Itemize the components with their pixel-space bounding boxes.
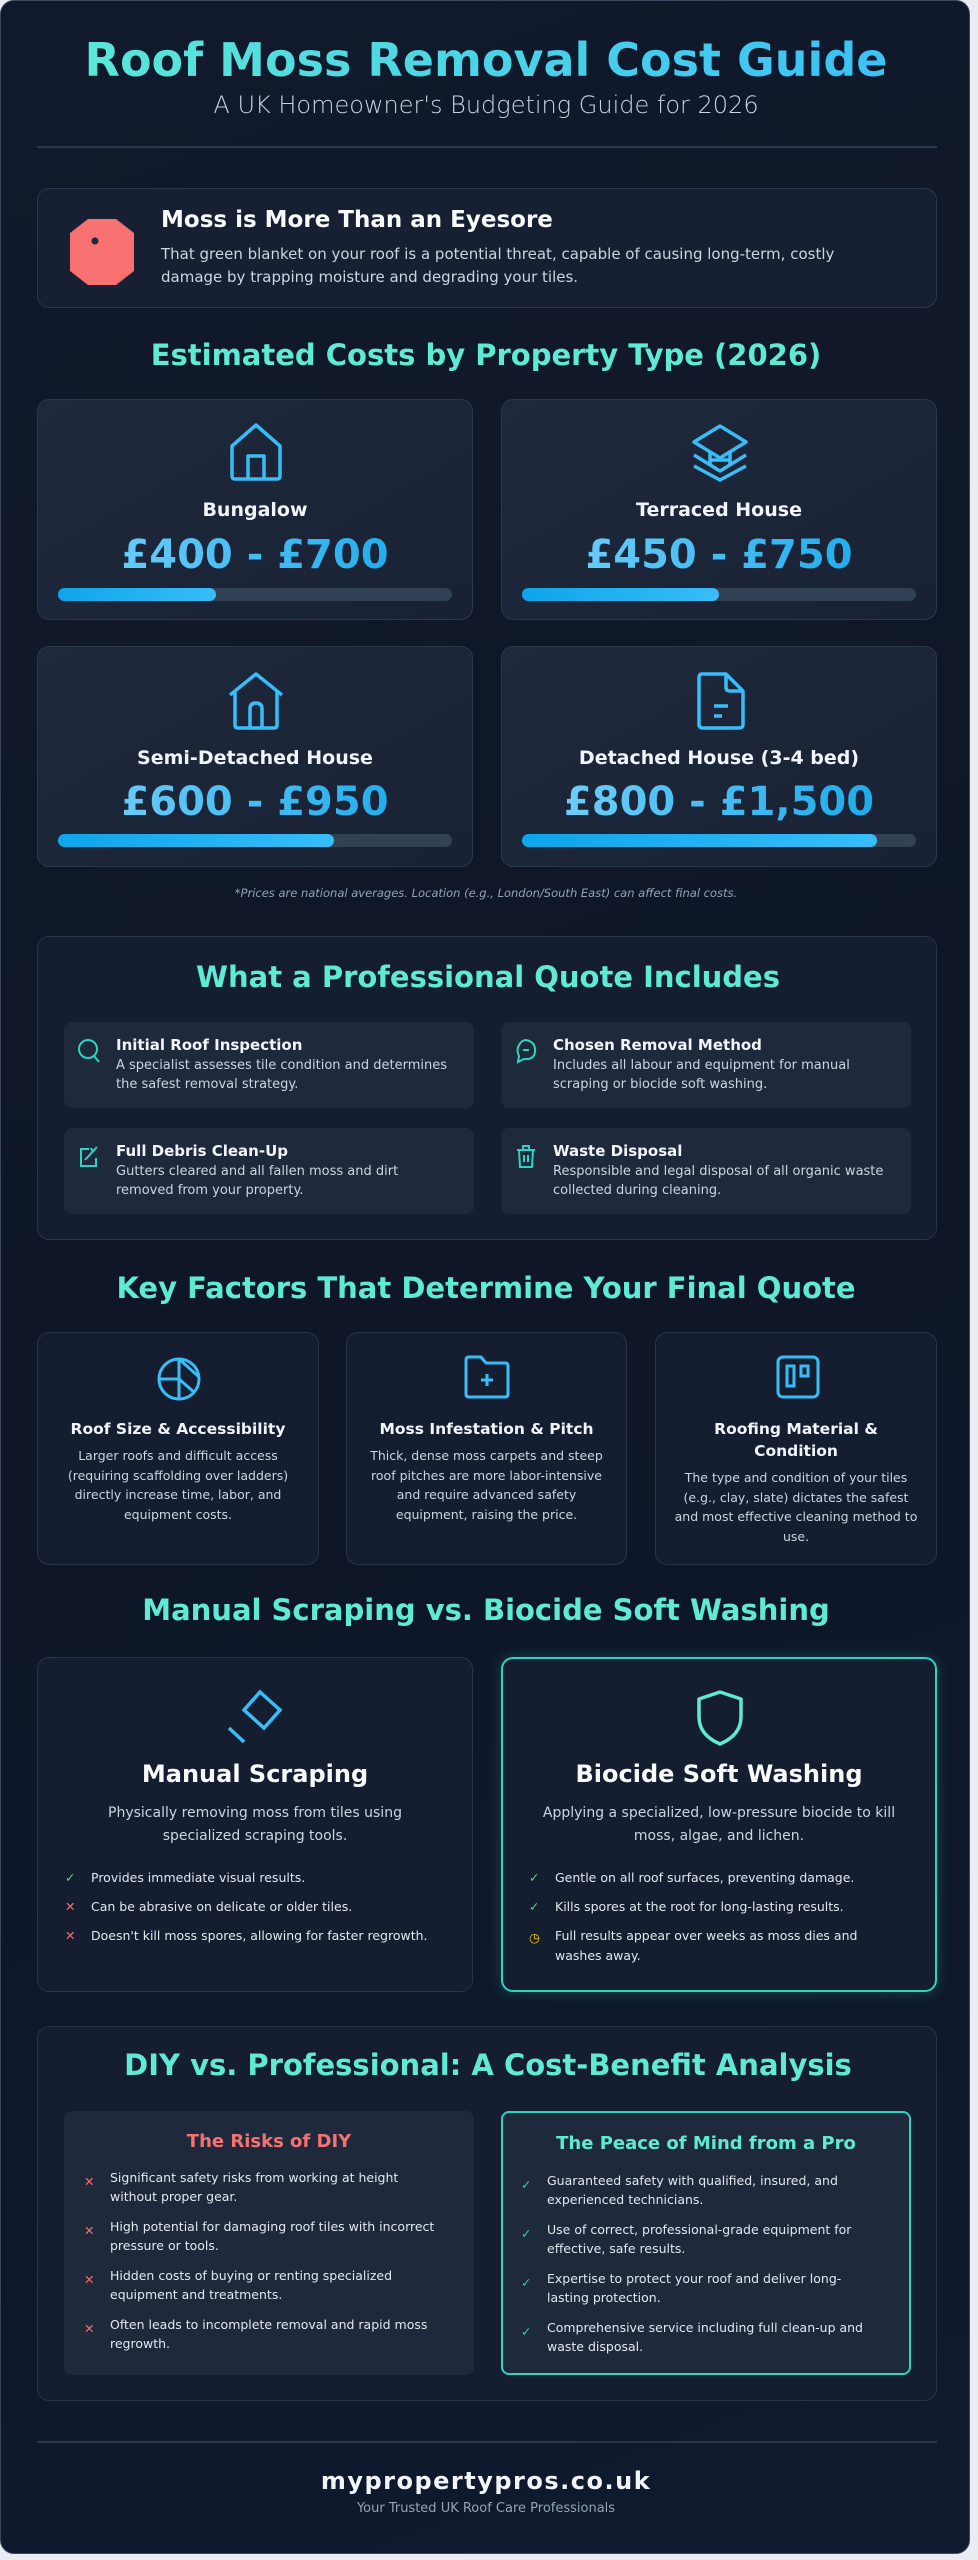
list: manual pros/cons: Provides immediate visual results. [91,1870,305,1885]
list: manual pros/cons: Doesn't kill moss spores, allowing for faster regrowth. [91,1928,428,1943]
card: bungalow: £400 - £700 [121,532,389,578]
list: manual pros/cons [65,1870,428,1943]
factor: roof size: Roof Size & Accessibility [71,1420,285,1438]
box: pro peace of mind: ✓ [521,2324,531,2339]
item: inspection: A specialist assesses tile condition and determines the safest removal strategy. [116,1058,447,1092]
alert panel [37,188,937,308]
factor: moss infestation [346,1332,627,1565]
box: risks of DIY: The Risks of DIY [187,2131,351,2152]
list: biocide pros: ✓ [529,1870,539,1885]
icon: layers [692,424,748,482]
card: terraced: Terraced House [636,499,802,521]
icon: scraper [228,1690,282,1744]
factor: roofing material [655,1332,937,1565]
alert heading: Moss is More Than an Eyesore [161,207,553,233]
item: waste disposal: Waste Disposal [553,1142,682,1160]
icon: document [697,672,745,730]
icon: folder plus [464,1356,510,1398]
factor: roofing material: The type and condition of your tiles (e.g., clay, slate) dictates the safest and most effective cleaning method to use. [675,1470,917,1544]
box: risks of DIY: Significant safety risks from working at height without proper gear. [110,2170,398,2204]
box: pro peace of mind: Use of correct, professional-grade equipment for effective, safe results. [547,2222,851,2256]
box: pro peace of mind: ✓ [521,2177,531,2192]
list: biocide pros: ✓ [529,1899,539,1914]
panel: biocide soft washing [501,1657,937,1992]
item: clean-up: Full Debris Clean-Up [116,1142,288,1160]
list: biocide pros [529,1870,857,1963]
box: risks of DIY: ✕ [84,2174,94,2189]
alert text: That green blanket on your roof is a potential threat, capable of causing long-term, costly damage by trapping moisture and degrading your tiles. [161,245,834,286]
factor: moss infestation: Moss Infestation & Pitch [379,1420,594,1438]
list: biocide pros: Full results appear over weeks as moss dies and washes away. [555,1928,857,1963]
heading: key factors: Key Factors That Determine Your Final Quote [116,1271,856,1305]
box: pro peace of mind: Expertise to protect your roof and deliver long-lasting protection. [547,2271,841,2305]
box: risks of DIY: Hidden costs of buying or renting specialized equipment and treatments. [110,2268,392,2302]
item: waste disposal [501,1128,911,1214]
item: waste disposal: Responsible and legal disposal of all organic waste collected during cleaning. [553,1164,883,1198]
factor: roof size [37,1332,319,1565]
card: semi-detached [37,646,473,867]
item: inspection: Initial Roof Inspection [116,1036,302,1054]
item: inspection [64,1022,474,1108]
card: terraced [501,399,937,620]
icon: pie [158,1358,200,1400]
list: manual pros/cons: ✕ [65,1899,75,1914]
heading: manual vs biocide: Manual Scraping vs. Biocide Soft Washing [142,1593,830,1627]
footer tagline: Your Trusted UK Roof Care Professionals [357,2501,615,2516]
icon: shield [697,1690,743,1746]
list: manual pros/cons: Can be abrasive on delicate or older tiles. [91,1899,352,1914]
box: risks of DIY [64,2111,474,2375]
card: detached [501,646,937,867]
panel: manual scraping: Manual Scraping [142,1760,368,1788]
footer site: mypropertypros.co.uk [321,2467,651,2495]
card: semi-detached: £600 - £950 [121,779,389,825]
item: removal method: Chosen Removal Method [553,1036,762,1054]
card: detached: Detached House (3-4 bed) [579,747,859,769]
box: pro peace of mind: The Peace of Mind from a Pro [556,2133,856,2154]
box: risks of DIY: High potential for damaging roof tiles with incorrect pressure or tools. [110,2219,434,2253]
list: manual pros/cons: ✓ [65,1870,75,1885]
item: clean-up: Gutters cleared and all fallen moss and dirt removed from your property. [116,1164,398,1198]
note: *Prices are national averages. Location (e.g., London/South East) can affect final costs. [235,886,737,900]
item: removal method: Includes all labour and equipment for manual scraping or biocide soft washing. [553,1058,850,1092]
list: biocide pros: Kills spores at the root for long-lasting results. [555,1899,844,1914]
card: terraced: £450 - £750 [585,532,853,578]
box: risks of DIY: ✕ [84,2321,94,2336]
heading: What a Professional Quote Includes [196,960,780,994]
factor: moss infestation: Thick, dense moss carpets and steep roof pitches are more labor-intensive and require advanced safety equipment, raising the price. [370,1448,603,1522]
item: removal method [501,1022,911,1108]
card: bungalow: Bungalow [202,499,308,521]
icon: tag [70,219,134,285]
panel: manual scraping: Physically removing moss from tiles using specialized scraping tools. [108,1805,402,1844]
heading: estimated costs: Estimated Costs by Property Type (2026) [151,338,821,372]
panel: DIY vs professional [37,2026,937,2401]
factor: roof size: Larger roofs and difficult access (requiring scaffolding over ladders) directly increase time, labor, and equipment costs. [68,1448,288,1522]
icon: board [776,1356,820,1398]
list: biocide pros: ◷ [529,1930,540,1945]
box: pro peace of mind: ✓ [521,2226,531,2241]
box: pro peace of mind [501,2111,911,2375]
list: biocide pros: Gentle on all roof surfaces, preventing damage. [555,1870,854,1885]
item: clean-up [64,1128,474,1214]
icon: house [230,423,282,481]
box: pro peace of mind: ✓ [521,2275,531,2290]
panel: biocide soft washing: Applying a specialized, low-pressure biocide to kill moss, algae, and lichen. [543,1805,895,1844]
panel: manual scraping [37,1657,473,1992]
box: pro peace of mind: Comprehensive service including full clean-up and waste disposal. [547,2320,863,2354]
factor: roofing material: Condition [754,1442,838,1460]
panel: biocide soft washing: Biocide Soft Washing [576,1760,862,1788]
card: bungalow [37,399,473,620]
panel: quote includes [37,936,937,1240]
box: risks of DIY: ✕ [84,2223,94,2238]
card: detached: £800 - £1,500 [564,779,874,825]
box: risks of DIY: Often leads to incomplete removal and rapid moss regrowth. [110,2317,427,2351]
list: manual pros/cons: ✕ [65,1928,75,1943]
factor: roofing material: Roofing Material & [714,1420,878,1438]
heading: DIY vs. Professional: A Cost-Benefit Analysis [124,2048,852,2082]
card: semi-detached: Semi-Detached House [137,747,373,769]
box: risks of DIY: ✕ [84,2272,94,2287]
subtitle: A UK Homeowner's Budgeting Guide for 2026 [213,91,759,119]
title: Roof Moss Removal Cost Guide [85,33,887,87]
icon: house arch [229,672,283,730]
box: pro peace of mind: Guaranteed safety with qualified, insured, and experienced technicians. [547,2173,838,2207]
